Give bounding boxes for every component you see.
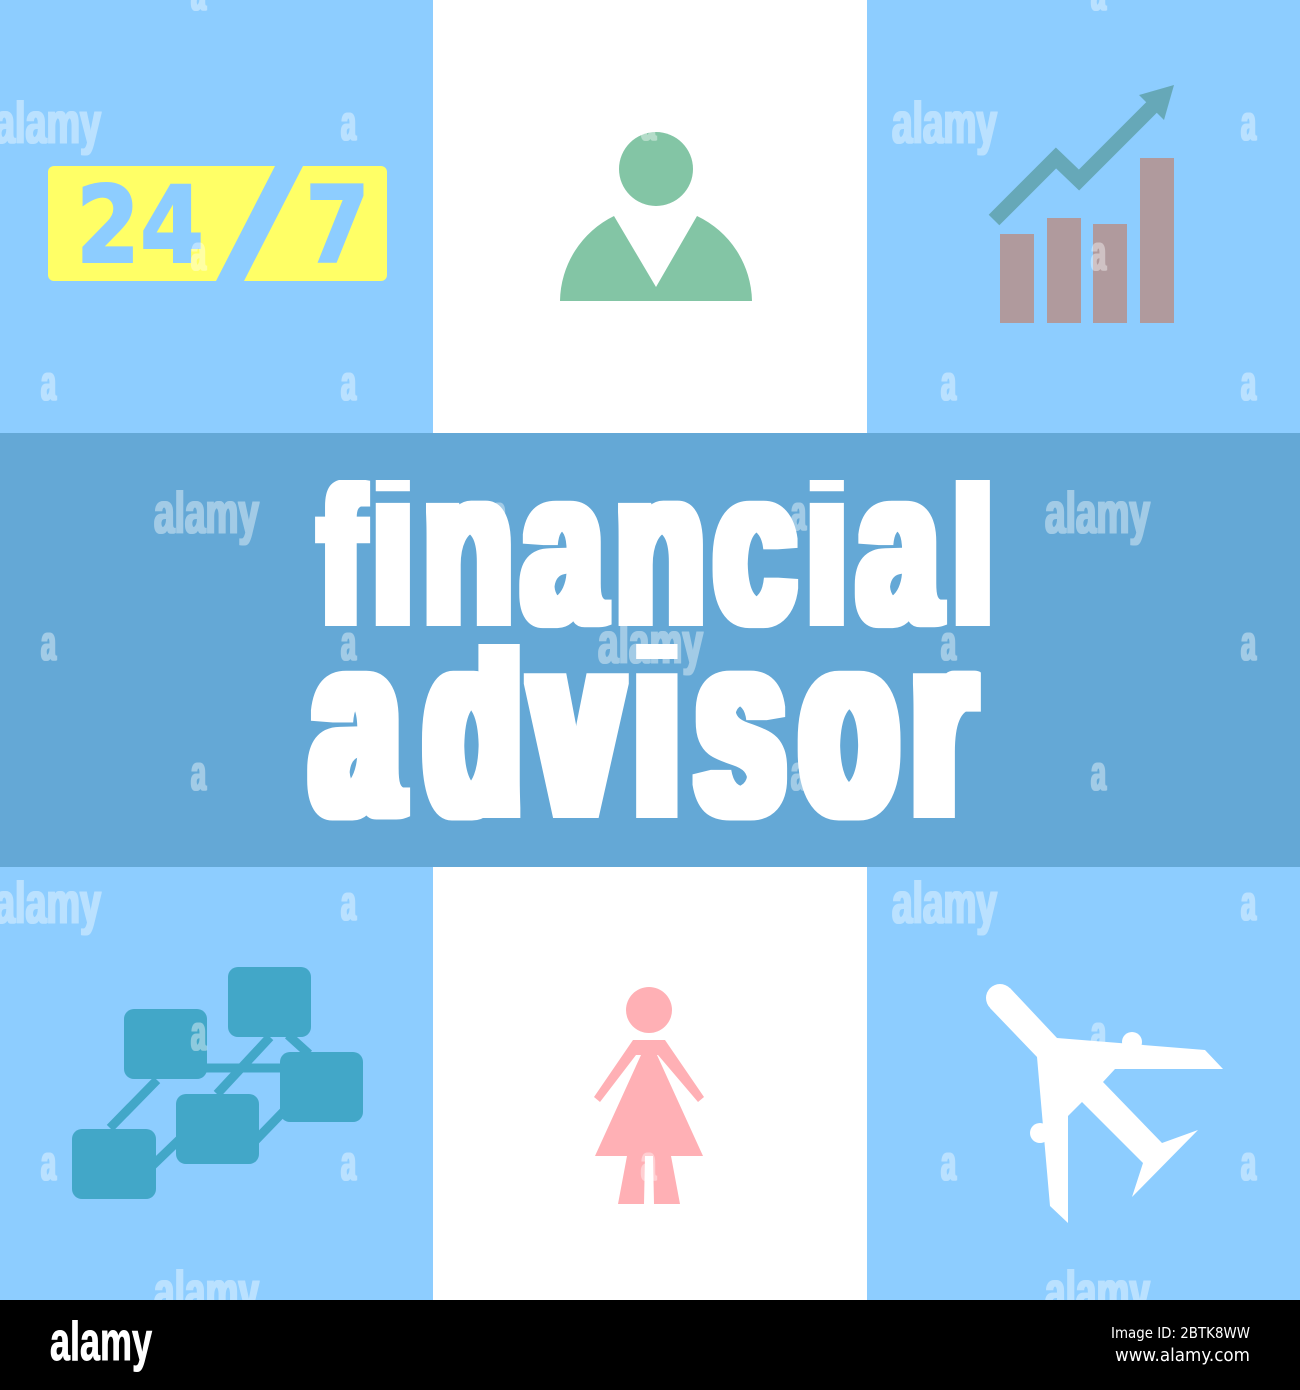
watermark: alamy repeated: a <box>641 1135 657 1191</box>
watermark: alamy repeated: a <box>641 95 657 151</box>
icon: connected network boxes <box>72 967 363 1199</box>
title line: advisor: advisor <box>313 582 973 867</box>
watermark: alamy repeated: alamy <box>1045 1260 1150 1325</box>
panel: bottom right tile <box>867 867 1300 1300</box>
watermark: alamy repeated: a <box>1091 1005 1107 1061</box>
watermark: alamy repeated: a <box>791 485 807 541</box>
icon: airplane <box>986 984 1223 1223</box>
panel: top right tile <box>867 0 1300 433</box>
watermark: alamy repeated: a <box>941 355 957 411</box>
image id: Image ID: 2BTK8WW <box>1111 1324 1250 1342</box>
footer bar <box>0 1300 1300 1390</box>
watermark: alamy repeated: alamy <box>892 871 997 936</box>
watermark: alamy repeated: a <box>791 745 807 801</box>
watermark: alamy repeated: a <box>41 615 57 671</box>
panel: top left tile <box>0 0 433 433</box>
watermark: alamy repeated: a <box>341 615 357 671</box>
watermark: alamy repeated: alamy <box>154 481 259 546</box>
icon: 24/7 badge <box>48 164 387 287</box>
watermark: alamy repeated: a <box>1241 1135 1257 1191</box>
watermark: alamy repeated: a <box>341 95 357 151</box>
watermark: alamy repeated: a <box>341 1135 357 1191</box>
icon: 24/7 badge: 24 <box>76 164 204 287</box>
footer logo: alamy <box>50 1310 152 1372</box>
watermark: alamy repeated: a <box>1241 355 1257 411</box>
panel: title band <box>0 433 1300 867</box>
watermark: alamy repeated: alamy <box>892 91 997 156</box>
watermark: alamy repeated: alamy <box>598 611 703 676</box>
watermark: alamy repeated: a <box>41 1135 57 1191</box>
watermark: alamy repeated: a <box>191 745 207 801</box>
watermark: alamy repeated: a <box>1091 745 1107 801</box>
watermark: alamy repeated: a <box>1241 875 1257 931</box>
panel: bottom centre tile <box>433 867 867 1300</box>
watermark: alamy repeated: a <box>191 1005 207 1061</box>
website: www.alamy.com <box>1115 1345 1250 1366</box>
watermark: alamy repeated: alamy <box>154 1260 259 1325</box>
title line: financial: financial <box>320 427 993 668</box>
watermark: alamy repeated: a <box>1091 225 1107 281</box>
watermark: alamy repeated: a <box>341 355 357 411</box>
icon: person <box>560 132 752 301</box>
watermark: alamy repeated: a <box>941 615 957 671</box>
icon: growth bar chart with arrow <box>994 85 1174 323</box>
watermark: alamy repeated: a <box>341 875 357 931</box>
icon: woman <box>594 987 704 1204</box>
icon: 24/7 badge: 7 <box>305 164 370 287</box>
panel: bottom left tile <box>0 867 433 1300</box>
watermark: alamy repeated: a <box>191 225 207 281</box>
title: financial advisor <box>307 480 990 820</box>
watermark: alamy repeated: a <box>1241 615 1257 671</box>
watermark: alamy repeated: a <box>491 485 507 541</box>
watermark: alamy repeated: a <box>41 355 57 411</box>
watermark: alamy repeated: a <box>1241 95 1257 151</box>
watermark: alamy repeated: a <box>941 1135 957 1191</box>
watermark: alamy repeated: alamy <box>1045 481 1150 546</box>
panel: top centre tile <box>433 0 867 433</box>
